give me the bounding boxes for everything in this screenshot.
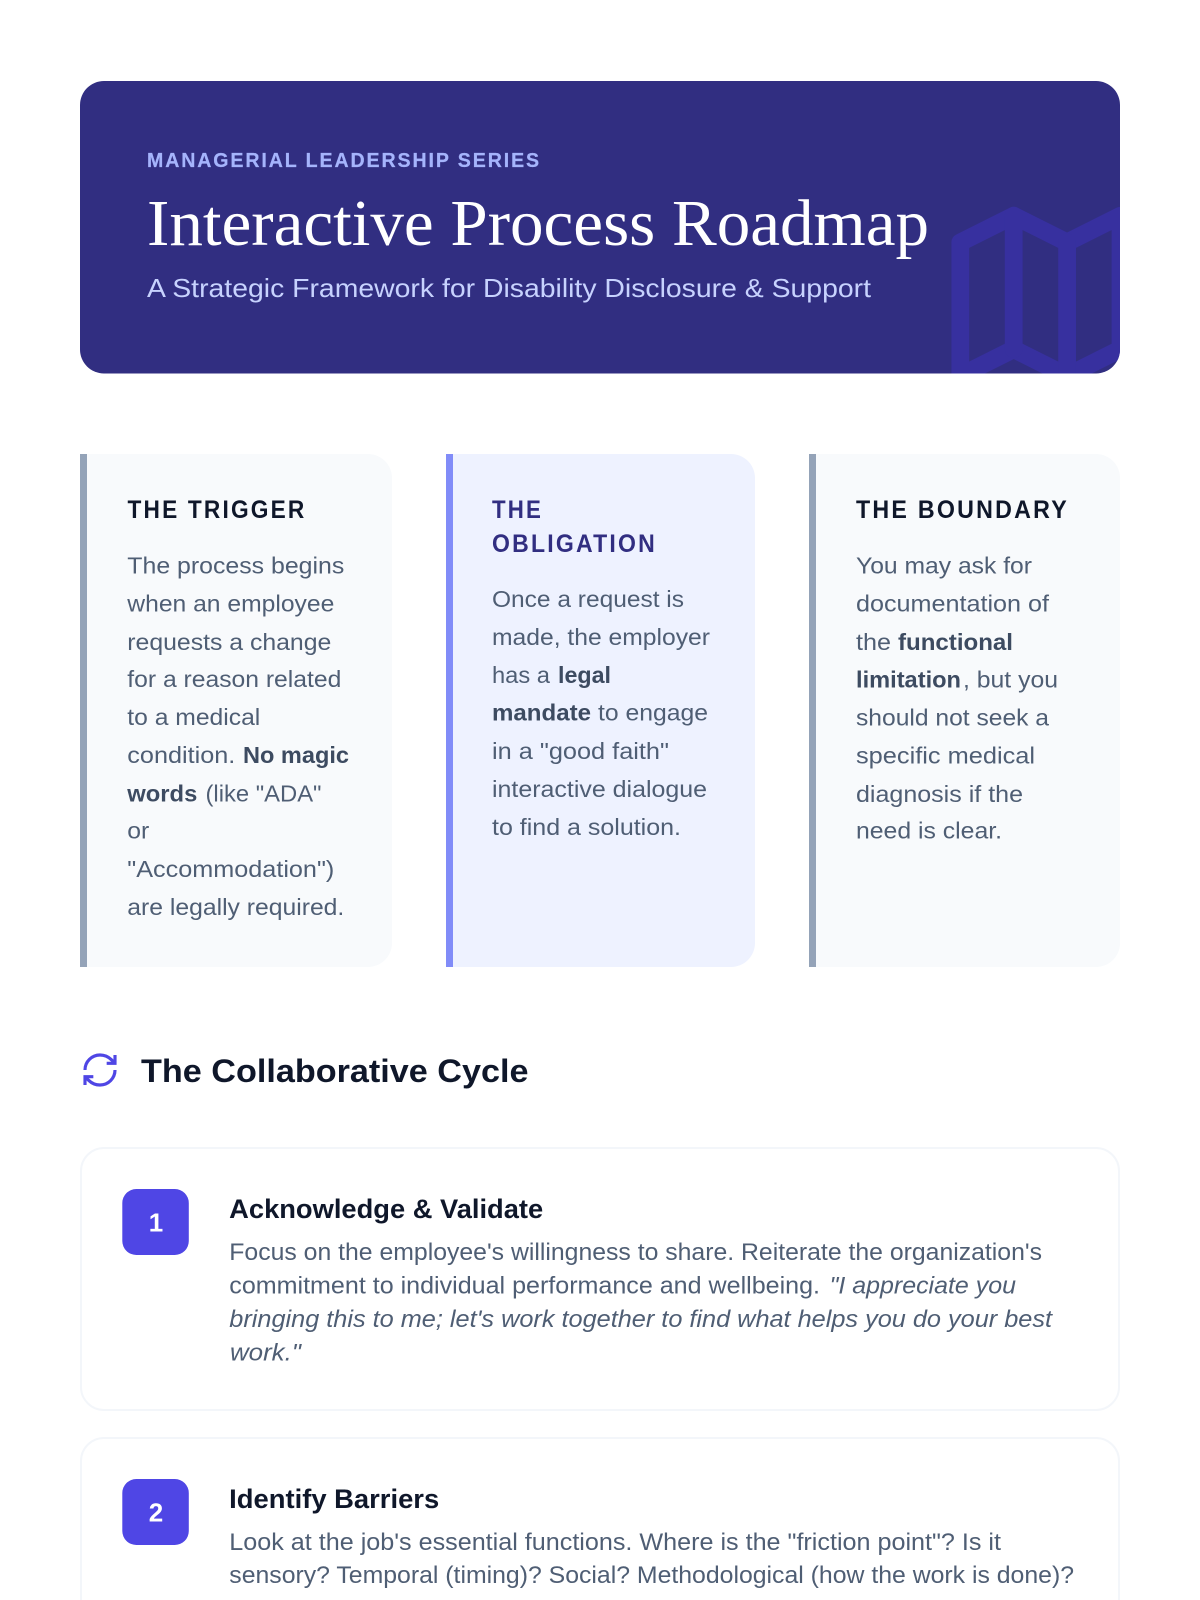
card body text: when an employee [126, 590, 334, 616]
card body text: documentation of [856, 590, 1050, 616]
header background [80, 81, 1120, 374]
card body text: legal [558, 662, 611, 688]
card heading: OBLIGATION [492, 530, 657, 558]
card heading [492, 496, 657, 558]
card body text [126, 552, 349, 920]
card body text: No magic [243, 742, 349, 768]
step body text: sensory? Temporal (timing)? Social? Methodological (how the work is done)? [229, 1562, 1074, 1589]
card body text: functional [898, 629, 1013, 655]
card body text: made, the employer [492, 624, 710, 650]
step body text [229, 1239, 1053, 1367]
card body text: to find a solution. [492, 814, 681, 840]
step card [81, 1438, 1119, 1600]
card body text: diagnosis if the [856, 781, 1023, 807]
step body text [229, 1529, 1074, 1589]
panel: the obligation [446, 454, 755, 967]
eyebrow label: MANAGERIAL LEADERSHIP SERIES [147, 149, 541, 172]
card heading: THE [492, 496, 543, 524]
card body text: or [127, 818, 150, 844]
card body text: for a reason related [127, 666, 341, 692]
step number badge [122, 1479, 189, 1545]
card body text: , but you [963, 666, 1058, 692]
card background [809, 454, 1120, 967]
card body text: You may ask for [856, 552, 1032, 578]
section heading: the collaborative cycle [85, 1053, 529, 1089]
card body text: condition. [127, 742, 235, 768]
step card [81, 1148, 1119, 1410]
card body text: "Accommodation") [127, 856, 334, 882]
card body text: to a medical [127, 704, 260, 730]
card body text: mandate [492, 700, 591, 726]
card body text: words [126, 780, 197, 806]
card body text: interactive dialogue [492, 776, 707, 802]
card body text: The process begins [127, 552, 344, 578]
card body text [492, 586, 710, 840]
step body text: bringing this to me; let's work together to find what helps you do your best [229, 1306, 1053, 1333]
step body text: Focus on the employee's willingness to share. Reiterate the organization's [229, 1239, 1042, 1266]
step heading: Acknowledge & Validate [229, 1194, 543, 1224]
icon: refresh cycle [85, 1055, 115, 1085]
card body text: need is clear. [856, 817, 1002, 843]
card background [446, 454, 755, 967]
title: Interactive Process Roadmap [147, 187, 929, 260]
step body text: work." [230, 1340, 302, 1367]
step body text: Look at the job's essential functions. Where is the "friction point"? Is it [229, 1529, 1001, 1556]
card body text: to engage [598, 700, 708, 726]
card accent bar [809, 454, 816, 967]
card body text: Once a request is [492, 586, 684, 612]
card heading: THE TRIGGER [128, 496, 306, 524]
card body text: specific medical [856, 742, 1035, 768]
card body text: requests a change [127, 629, 331, 655]
card body text [856, 552, 1058, 843]
card body text: should not seek a [856, 704, 1050, 730]
icon: map watermark [960, 216, 1120, 376]
step 2: identify barriers [81, 1438, 1119, 1600]
step 1: acknowledge and validate [81, 1148, 1119, 1410]
step heading: Identify Barriers [229, 1484, 439, 1514]
card body text: the [856, 629, 891, 655]
card body text: (like "ADA" [206, 780, 322, 806]
card heading: THE BOUNDARY [856, 496, 1069, 524]
step body text: "I appreciate you [830, 1273, 1016, 1300]
card body text: has a [492, 662, 551, 688]
card body text: limitation [856, 666, 961, 692]
step number badge: 2 [149, 1497, 163, 1527]
step number badge [122, 1189, 189, 1255]
card background [80, 454, 392, 967]
card accent bar [446, 454, 453, 967]
step number badge: 1 [149, 1207, 163, 1237]
card accent bar [80, 454, 87, 967]
panel: the trigger [80, 454, 392, 967]
card body text: in a "good faith" [492, 738, 669, 764]
section title: The Collaborative Cycle [141, 1053, 528, 1089]
subtitle: A Strategic Framework for Disability Disclosure & Support [147, 273, 872, 303]
header banner [80, 81, 1120, 376]
step body text: commitment to individual performance and wellbeing. [229, 1273, 820, 1300]
panel: the boundary [809, 454, 1120, 967]
card body text: are legally required. [127, 894, 344, 920]
